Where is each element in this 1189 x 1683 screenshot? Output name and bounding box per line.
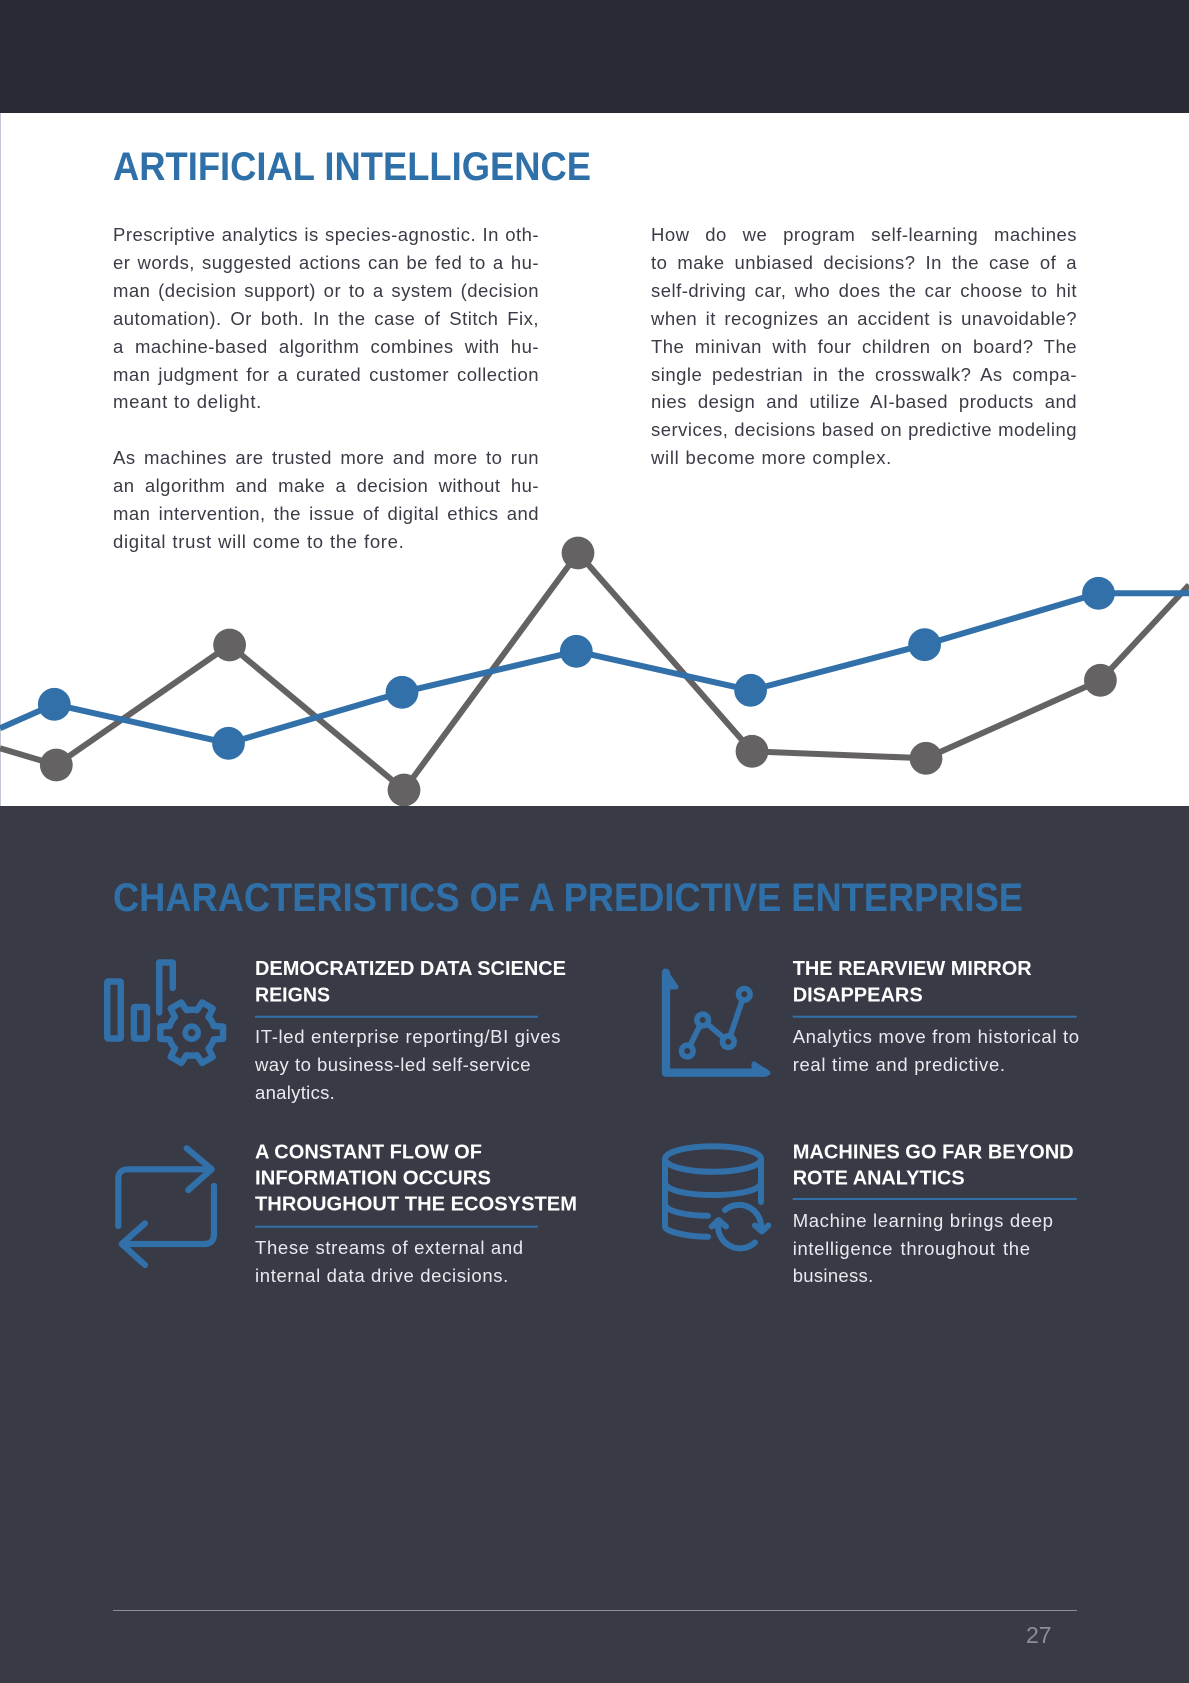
feature title [255,957,566,1007]
bottom dark panel [0,806,1189,1683]
footer rule [113,1610,1077,1611]
feature: constant flow of information [115,1140,577,1286]
white content panel [0,113,1189,806]
top dark band [0,0,1189,113]
feature: democratized data science [104,957,566,1103]
text block: left column: er words, suggested actions can be fed to a hu- [113,252,539,273]
feature text: analytics. [255,1082,335,1103]
feature text [792,1026,1080,1075]
text block: right column: to make unbiased decisions? In the case of a [651,252,1077,273]
feature title: REIGNS [255,984,330,1007]
text block: right column [651,224,1077,468]
feature text: business. [793,1265,874,1286]
feature text [255,1237,524,1286]
blue series [0,577,1189,760]
icon: database with sync arrows [665,1146,768,1248]
text block: right column: services, decisions based on predictive modeling [651,419,1077,440]
text block: right column: nies design and utilize AI-based products and [651,391,1077,412]
text block: left column: a machine-based algorithm combines with hu- [113,336,539,357]
page number: 27 [1026,1622,1052,1648]
feature title [793,957,1032,1007]
text block: right column: single pedestrian in the crosswalk? As compa- [651,364,1077,384]
feature title: DEMOCRATIZED DATA SCIENCE [255,957,566,980]
feature: rearview mirror [662,957,1080,1077]
icon: loop arrows [118,1148,214,1265]
feature title: THROUGHOUT THE ECOSYSTEM [255,1193,577,1216]
feature text: Machine learning brings deep [793,1210,1054,1231]
feature title [793,1140,1074,1189]
text block: right column: will become more complex. [651,447,892,468]
feature title [255,1140,577,1216]
feature text [255,1026,561,1103]
text block: right column: self-driving car, who does the car choose to hit [651,280,1077,301]
text block: left column: Prescriptive analytics is species-agnostic. In oth- [113,224,539,245]
feature: machines beyond rote analytics [662,1140,1077,1286]
text block: right column: How do we program self-learning machines [651,224,1077,245]
text block: left column: automation). Or both. In the case of Stitch Fix, [113,308,539,329]
text block: left column: man judgment for a curated customer collection [113,364,539,384]
text block: right column: when it recognizes an accident is unavoidable? [651,308,1077,329]
text block: left column: man intervention, the issue of digital ethics and [113,503,539,524]
feature text: real time and predictive. [793,1054,1006,1075]
feature text: Analytics move from historical to [793,1026,1080,1047]
feature text: These streams of external and [255,1237,524,1258]
feature title: ROTE ANALYTICS [793,1166,965,1189]
feature title: THE REARVIEW MIRROR [793,957,1032,980]
feature text [793,1210,1054,1286]
line chart [0,536,1189,806]
feature title: A CONSTANT FLOW OF [255,1140,482,1163]
text block: left column: an algorithm and make a decision without hu- [113,475,539,496]
feature title: MACHINES GO FAR BEYOND [793,1140,1074,1163]
text block: left column: meant to delight. [113,391,262,412]
feature title: INFORMATION OCCURS [255,1166,491,1189]
feature text: intelligence throughout the [793,1238,1031,1259]
text block: left column: digital trust will come to the fore. [113,531,404,552]
text block: right column: The minivan with four children on board? The [651,336,1077,357]
feature text: way to business-led self-service [255,1054,531,1075]
text block: left column [113,224,539,552]
icon: bars and gear [107,962,223,1063]
text block: left column: man (decision support) or to a system (decision [113,280,539,301]
gray series [0,537,1189,806]
feature title: DISAPPEARS [793,984,923,1007]
text block: left column: As machines are trusted more and more to run [113,447,539,468]
feature text: internal data drive decisions. [255,1265,509,1286]
icon: line chart [665,971,768,1073]
feature text: IT-led enterprise reporting/BI gives [255,1026,561,1047]
